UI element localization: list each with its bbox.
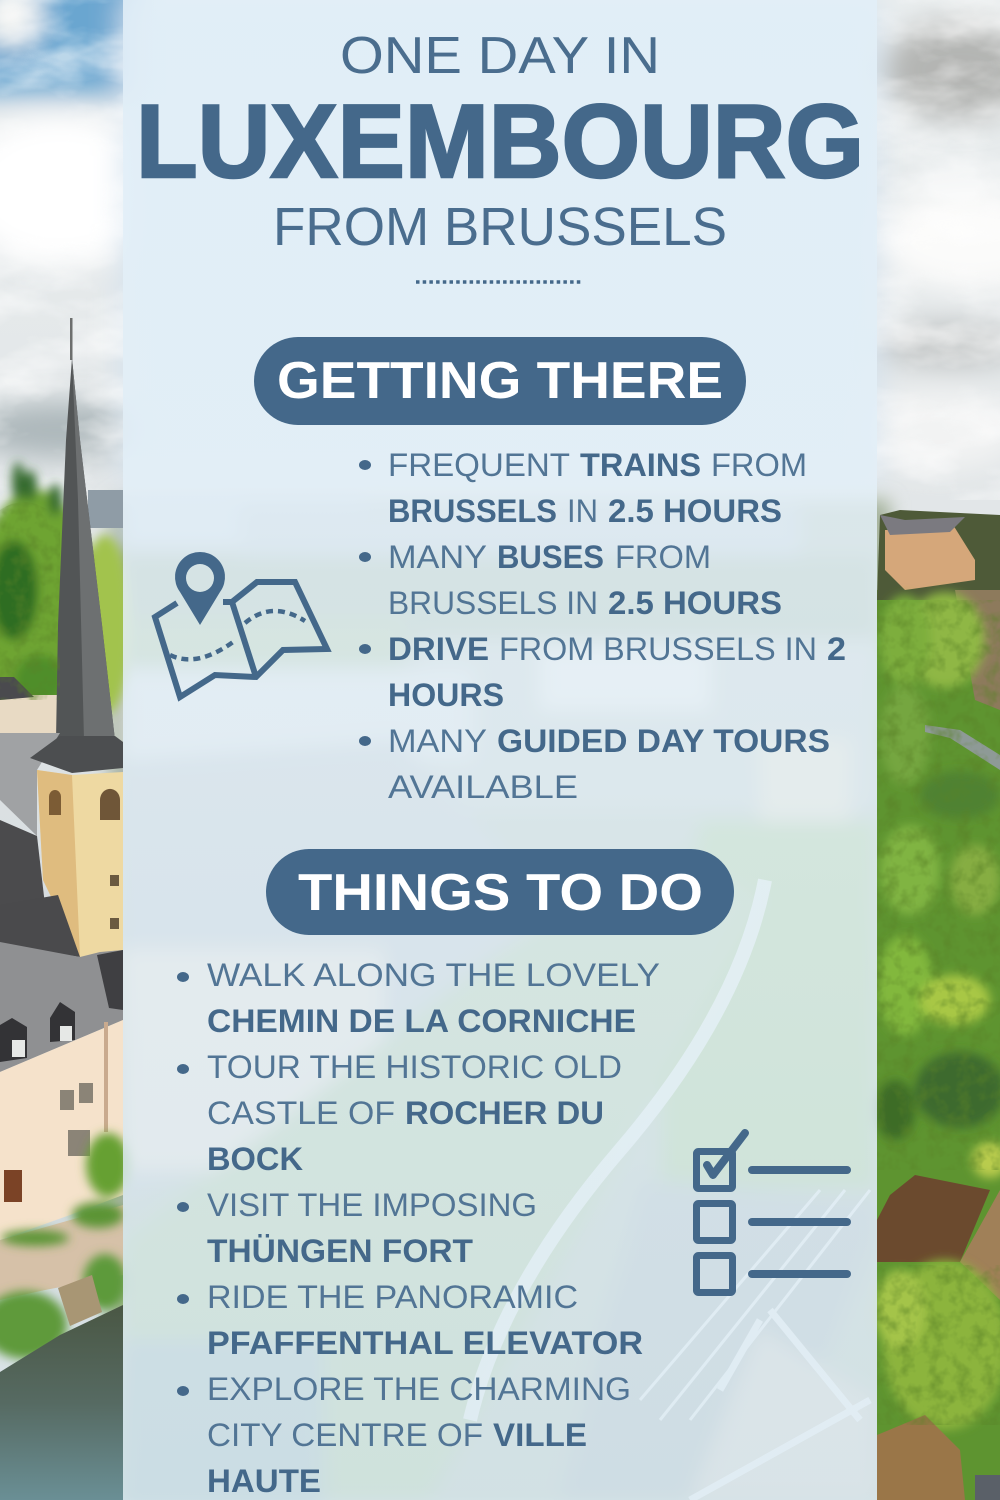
heading pill: Getting there	[254, 337, 746, 425]
foliage texture	[0, 490, 1000, 1425]
bullet: trains: IN	[567, 493, 598, 529]
heading pill: Things to do: THINGS TO DO	[298, 864, 703, 922]
bullet: buses: BUSES	[497, 539, 604, 575]
bullet: Pfaffenthal Elevator: RIDE THE PANORAMIC	[207, 1279, 578, 1315]
bullet: Ville Haute: HAUTE	[207, 1463, 321, 1499]
bullet: Rocher du Bock: CASTLE OF	[207, 1095, 395, 1131]
bullet: buses: FROM	[615, 539, 711, 575]
bullet: Chemin de la Corniche	[177, 957, 660, 1039]
bullet: tours	[359, 723, 830, 805]
bullet: drive: DRIVE	[388, 631, 489, 667]
bullet: Rocher du Bock: BOCK	[207, 1141, 303, 1177]
icon: checklist	[696, 1133, 847, 1292]
bullet: buses: MANY	[388, 539, 487, 575]
bullet: tours: AVAILABLE	[388, 769, 578, 805]
bullet: buses	[359, 539, 782, 621]
bullet: trains: FREQUENT	[388, 447, 570, 483]
bullet: Chemin de la Corniche: WALK ALONG THE LOVELY	[207, 957, 660, 993]
bullet: drive	[359, 631, 846, 713]
bullet: Chemin de la Corniche: CHEMIN DE LA CORNICHE	[207, 1003, 636, 1039]
bullet: drive: HOURS	[388, 677, 504, 713]
title line: Luxembourg: LUXEMBOURG	[136, 84, 864, 200]
title line: One day in: ONE DAY IN	[340, 27, 660, 85]
bullet: Ville Haute: EXPLORE THE CHARMING	[207, 1371, 631, 1407]
bullet: Thüngen Fort: THÜNGEN FORT	[207, 1233, 473, 1269]
bullet: tours: GUIDED DAY TOURS	[497, 723, 830, 759]
bullet: buses: BRUSSELS IN	[388, 585, 598, 621]
bullet: Ville Haute: VILLE	[493, 1417, 587, 1453]
bullet: Pfaffenthal Elevator	[177, 1279, 643, 1361]
bullet: Ville Haute	[177, 1371, 631, 1499]
bullet: buses: 2.5 HOURS	[608, 585, 782, 621]
heading pill: Things to do	[266, 849, 734, 935]
bullet: Thüngen Fort	[177, 1187, 537, 1269]
cloud texture	[0, 0, 1000, 500]
bullet: trains: 2.5 HOURS	[608, 493, 782, 529]
bullet: drive: FROM BRUSSELS IN	[499, 631, 817, 667]
bullet: trains	[359, 447, 807, 529]
bullet: trains: BRUSSELS	[388, 493, 557, 529]
bullet: tours: MANY	[388, 723, 487, 759]
bullet: Thüngen Fort: VISIT THE IMPOSING	[207, 1187, 537, 1223]
list: getting there	[359, 447, 846, 805]
under-panel town blocks	[110, 492, 890, 1500]
bullet: drive: 2	[827, 631, 846, 667]
title line: From Brussels: FROM BRUSSELS	[273, 197, 727, 257]
bullet: Rocher du Bock: TOUR THE HISTORIC OLD	[207, 1049, 622, 1085]
bullet: Pfaffenthal Elevator: PFAFFENTHAL ELEVATOR	[207, 1325, 643, 1361]
bullet: Ville Haute: CITY CENTRE OF	[207, 1417, 483, 1453]
bullet: Rocher du Bock	[177, 1049, 622, 1177]
bullet: Rocher du Bock: ROCHER DU	[405, 1095, 604, 1131]
icon: folded map with location pin	[155, 552, 327, 697]
bullet: trains: FROM	[711, 447, 807, 483]
left photo: church and spire	[0, 318, 131, 1500]
right photo: green valley	[875, 510, 1000, 1500]
bullet: trains: TRAINS	[580, 447, 701, 483]
title block	[136, 27, 864, 257]
heading pill: Getting there: GETTING THERE	[277, 352, 723, 410]
translucent panel	[123, 0, 877, 1500]
list: things to do	[177, 957, 660, 1499]
